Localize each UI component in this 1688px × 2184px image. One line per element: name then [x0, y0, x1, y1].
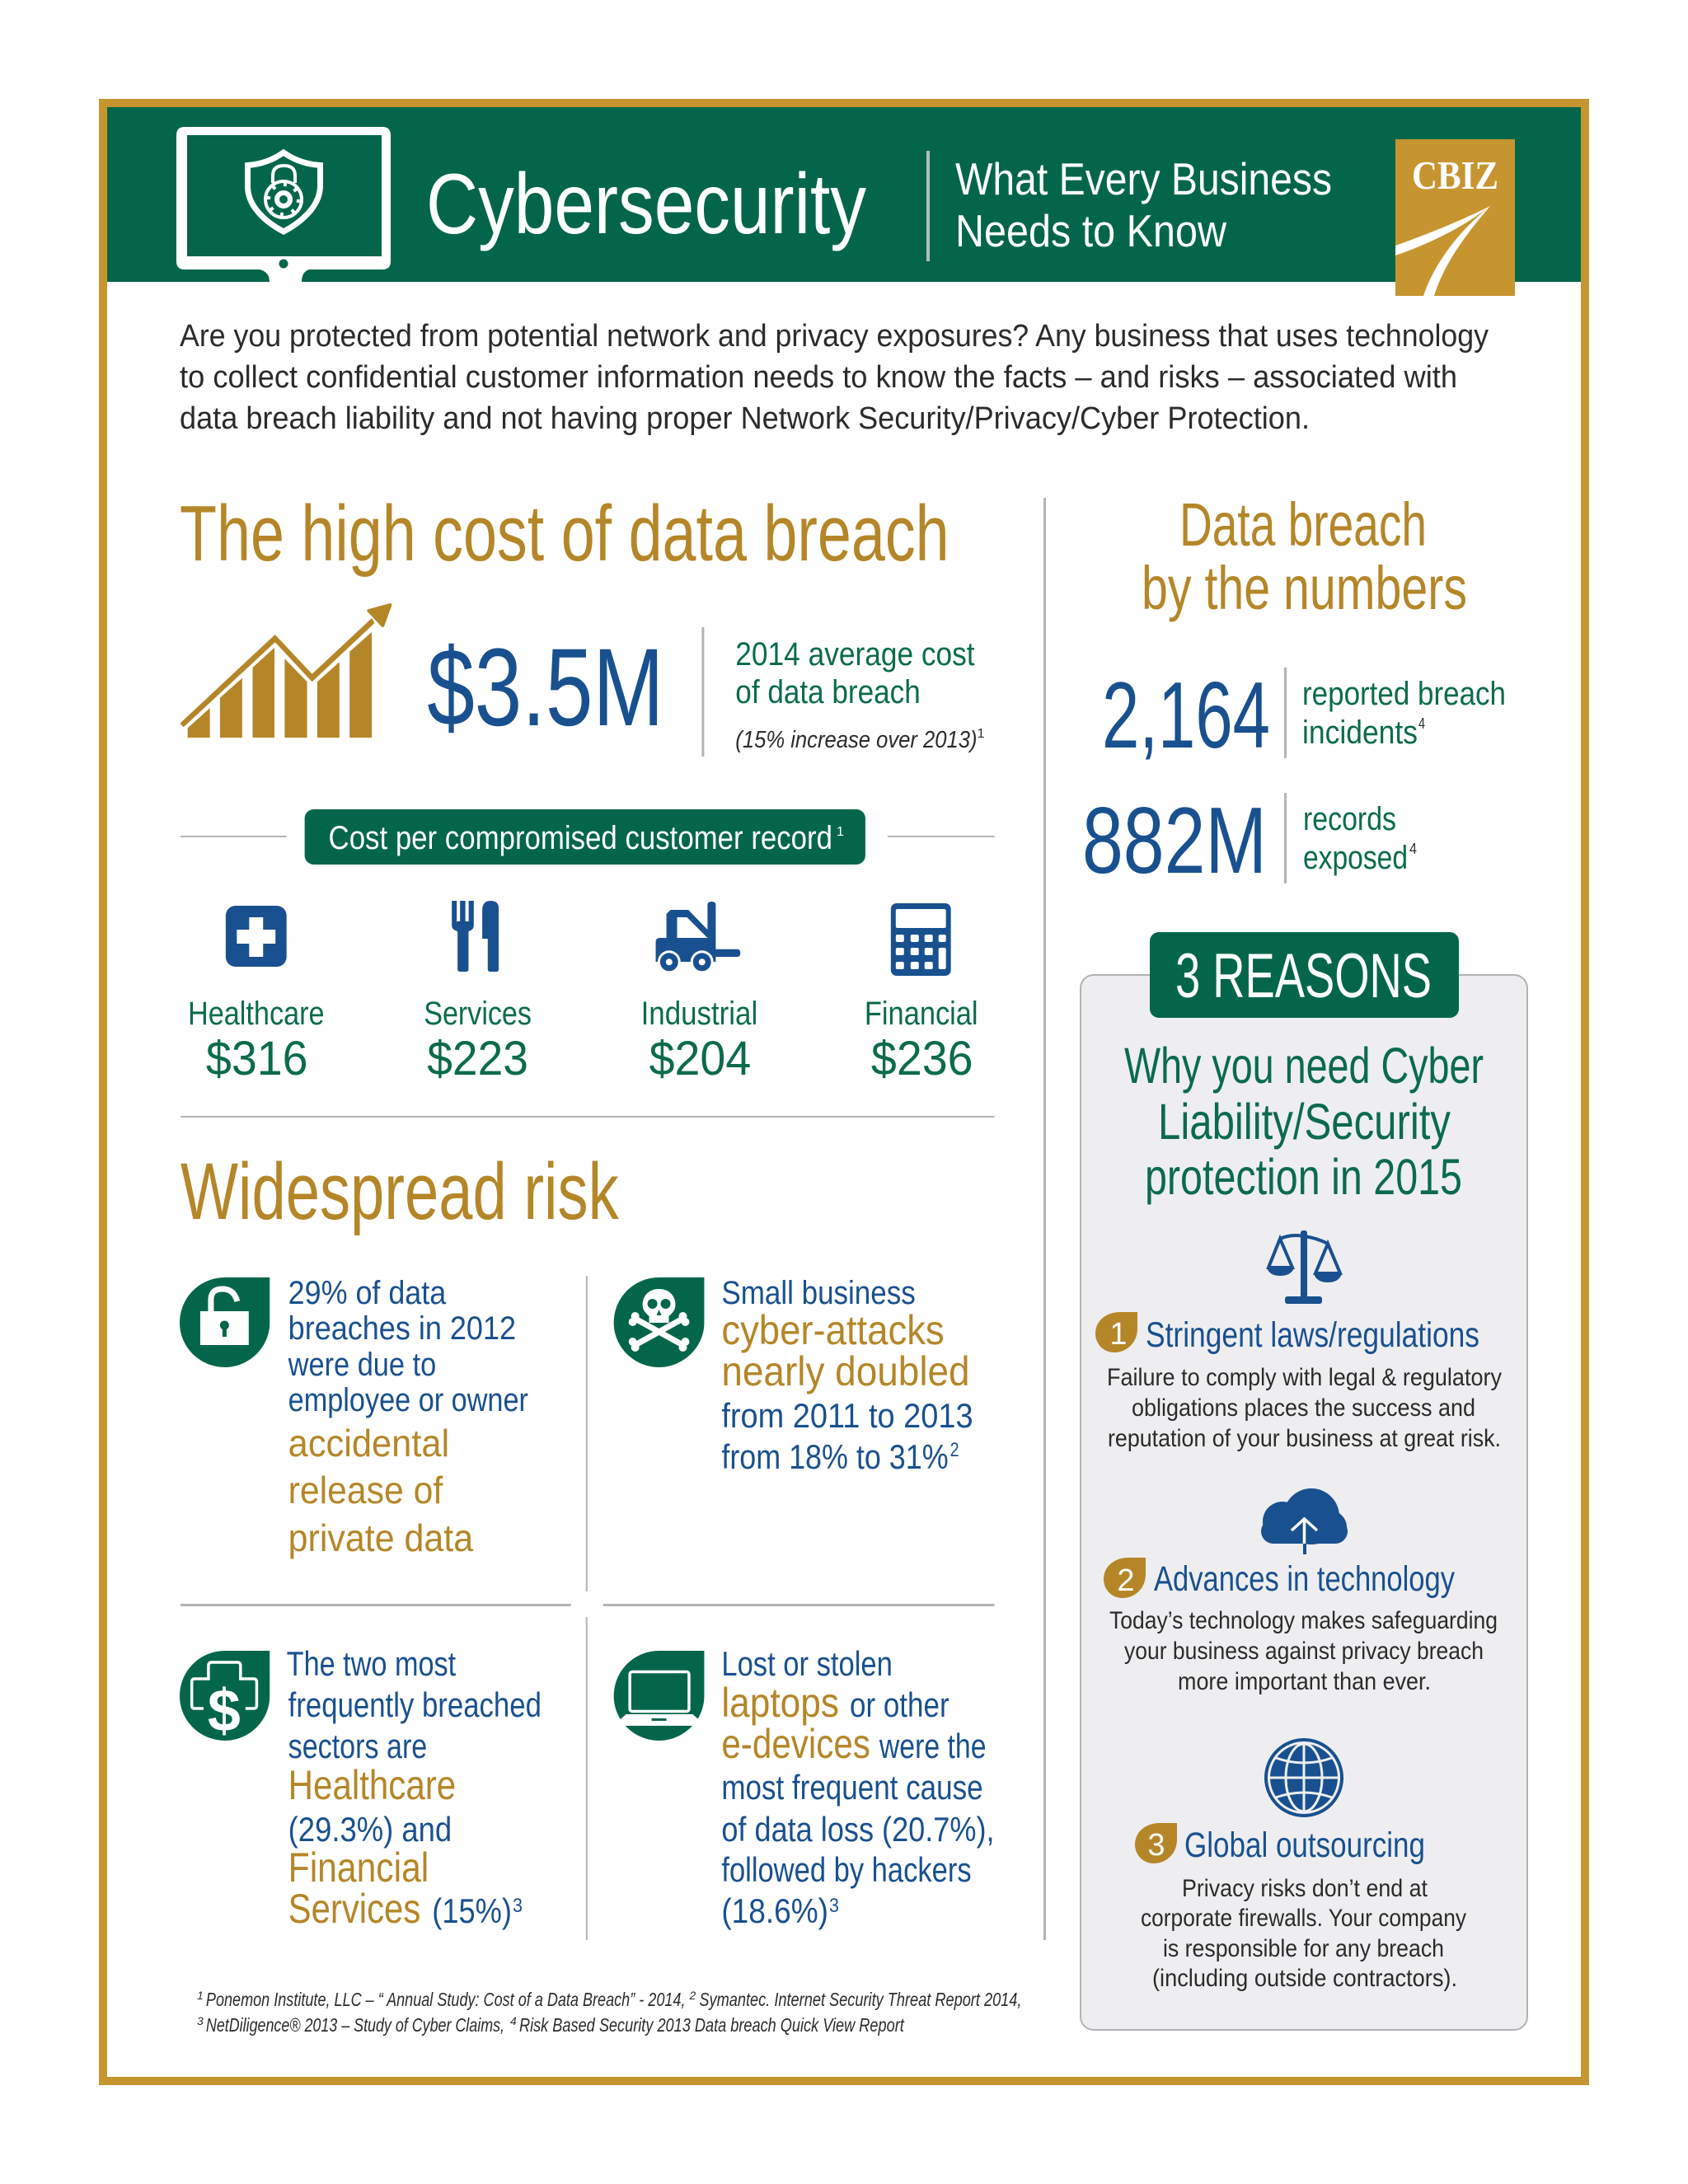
header banner [107, 107, 1581, 296]
text block: Lost or stolen [721, 1644, 893, 1683]
icon: fork and knife [452, 901, 499, 972]
reason 3: Global outsourcing [1184, 1825, 1425, 1865]
icon: monitor with shield lock [176, 127, 391, 282]
sector costs: $316 [206, 1033, 308, 1085]
stat caption: 1 [978, 727, 985, 741]
icon: forklift [656, 902, 740, 973]
text block: cyber-attacks [721, 1307, 945, 1353]
panel: breached sectors [180, 1644, 542, 1932]
heading: data breach by the numbers [1142, 490, 1467, 622]
stat caption: (15% increase over 2013) [735, 727, 978, 753]
icon: calculator [891, 903, 951, 976]
icon: rising bar chart [180, 605, 390, 738]
reason 2: Today’s technology makes safeguarding [1109, 1607, 1498, 1634]
panel heading: protection in 2015 [1145, 1149, 1462, 1205]
footnotes: Symantec. Internet Security Threat Report 2014, [699, 1989, 1021, 2010]
stat: records exposed: 882M [1082, 789, 1267, 893]
text block: The two most [287, 1644, 456, 1683]
heading: widespread risk: Widespread risk [181, 1146, 619, 1236]
text block: followed by hackers [721, 1850, 972, 1889]
intro text: to collect confidential customer information needs to know the facts – and risks – associated with [180, 360, 1457, 395]
badge: 3 [1135, 1823, 1177, 1863]
text block: nearly doubled [721, 1348, 970, 1394]
text block: from 18% to 31% [721, 1437, 949, 1476]
subtitle: What Every Business [955, 153, 1332, 204]
stat caption [735, 636, 985, 753]
icon: open padlock [180, 1277, 270, 1367]
footnotes: 2 [688, 1989, 696, 2002]
footnotes: Ponemon Institute, LLC – “ Annual Study: Cost of a Data Breach” - 2014, [206, 1989, 685, 2010]
text block: frequently breached [288, 1685, 542, 1724]
reason 1: Failure to comply with legal & regulatory [1107, 1364, 1502, 1391]
reason 1: reputation of your business at great risk. [1108, 1425, 1501, 1452]
badge: 3: 3 [1147, 1828, 1165, 1863]
reason 1: Stringent laws/regulations [1146, 1315, 1479, 1355]
reason 3 [1135, 1823, 1466, 1992]
text block: Small business [721, 1275, 916, 1311]
text block: Services [288, 1886, 420, 1932]
stat: reported incidents [1102, 663, 1506, 768]
text block: most frequent cause [721, 1768, 983, 1807]
panel heading [1124, 1038, 1484, 1205]
heading: data breach by the numbers: by the numbers [1142, 554, 1467, 622]
reason 2 [1104, 1558, 1498, 1695]
reason 3: (including outside contractors). [1152, 1965, 1457, 1992]
reason 1: obligations places the success and [1132, 1394, 1475, 1422]
text block: laptops [721, 1680, 839, 1726]
reason 2: more important than ever. [1178, 1668, 1431, 1695]
text block: breaches in 2012 [288, 1310, 516, 1347]
sector costs: $223 [427, 1033, 528, 1085]
intro text [180, 319, 1489, 436]
badge: 2 [1104, 1558, 1146, 1598]
text block [288, 1275, 528, 1559]
stat: reported incidents: reported breach [1302, 676, 1506, 712]
text block: employee or owner [288, 1382, 528, 1418]
stat: reported incidents: 2,164 [1102, 663, 1270, 768]
footnotes: Risk Based Security 2013 Data breach Quick View Report [519, 2014, 905, 2036]
stat: records exposed: 4 [1409, 841, 1417, 857]
footnotes: 3 [197, 2014, 204, 2027]
text block: 3 [513, 1895, 523, 1917]
text block [721, 1644, 995, 1930]
sector costs: Services [424, 996, 532, 1032]
badge: 1 [1095, 1312, 1137, 1352]
text block: of data loss (20.7%), [721, 1810, 995, 1849]
icon: medical dollar [180, 1651, 270, 1744]
sector costs: Financial [865, 996, 978, 1032]
reason 3: Privacy risks don’t end at [1182, 1875, 1428, 1902]
subtitle [955, 153, 1332, 256]
text block: 29% of data [288, 1275, 447, 1311]
badge: 3 reasons: 3 REASONS [1175, 941, 1432, 1011]
panel: lost devices [614, 1644, 995, 1930]
badge: 1: 1 [1109, 1317, 1128, 1352]
panel: cyber-attacks [614, 1275, 973, 1476]
reason 2: your business against privacy breach [1124, 1638, 1484, 1665]
logo: CBIZ: CBIZ [1412, 152, 1498, 198]
panel heading: Liability/Security [1158, 1094, 1451, 1150]
reason 3: is responsible for any breach [1163, 1935, 1444, 1962]
banner: cost per record: 1 [837, 825, 844, 839]
footnotes: 1 [197, 1989, 204, 2002]
title: Cybersecurity [426, 157, 866, 252]
stat: records exposed: records [1303, 801, 1396, 837]
sector costs [188, 996, 978, 1085]
text block: were due to [288, 1347, 436, 1383]
left column [180, 490, 1021, 2036]
stat: reported incidents: 4 [1418, 715, 1425, 732]
sector costs: Industrial [641, 996, 757, 1032]
banner: cost per record: Cost per compromised customer record [329, 820, 832, 856]
icon: cloud upload [1261, 1488, 1348, 1554]
text block: or other [850, 1685, 950, 1724]
reason 3: corporate firewalls. Your company [1141, 1905, 1466, 1932]
text block: Healthcare [288, 1762, 456, 1808]
footnotes: NetDiligence® 2013 – Study of Cyber Claims, [206, 2014, 504, 2036]
text block: 2 [950, 1439, 959, 1461]
icon: healthcare [226, 906, 287, 967]
sector costs: $236 [871, 1033, 973, 1085]
banner: cost per record [305, 809, 865, 865]
reason 2: Advances in technology [1154, 1559, 1455, 1599]
subtitle: Needs to Know [955, 205, 1226, 256]
panel heading: Why you need Cyber [1124, 1038, 1484, 1094]
text block: private data [288, 1516, 474, 1559]
text block: 3 [829, 1895, 839, 1917]
text block: (15%) [432, 1891, 512, 1930]
text block: (18.6%) [721, 1891, 828, 1930]
text block: release of [288, 1469, 443, 1511]
icon: skull and crossbones [614, 1277, 704, 1367]
text block: accidental [288, 1422, 449, 1465]
stat: reported incidents: incidents [1302, 715, 1418, 751]
icon: globe [1266, 1740, 1342, 1816]
sector costs: $204 [649, 1033, 751, 1085]
text block [721, 1275, 973, 1476]
icon: scales [1267, 1230, 1342, 1304]
heading: data breach by the numbers: Data breach [1179, 490, 1427, 559]
text block [287, 1644, 542, 1932]
logo: CBIZ [1395, 139, 1515, 296]
sector costs: Healthcare [188, 996, 325, 1032]
text block: were the [879, 1727, 987, 1765]
stat: records exposed: exposed [1303, 840, 1408, 876]
text block: from 2011 to 2013 [721, 1396, 973, 1435]
text block: sectors are [288, 1727, 427, 1765]
intro text: Are you protected from potential network and privacy exposures? Any business that uses technology [180, 319, 1489, 354]
intro text: data breach liability and not having proper Network Security/Privacy/Cyber Protection. [180, 401, 1310, 436]
stat caption: 2014 average cost [735, 636, 975, 673]
heading: the high cost of data breach: The high cost of data breach [180, 490, 950, 578]
stat caption: of data breach [735, 674, 921, 710]
badge: 3 reasons [1150, 932, 1459, 1018]
footnotes: 4 [510, 2014, 517, 2027]
icon: medical dollar: $ [208, 1678, 241, 1744]
footnotes [197, 1989, 1021, 2036]
panel: 3 reasons [1081, 932, 1527, 2030]
panel: accidental release [180, 1275, 528, 1559]
text block: e-devices [721, 1721, 870, 1767]
reason 1 [1095, 1312, 1502, 1452]
text block: (29.3%) and [288, 1810, 452, 1849]
text block: Financial [288, 1844, 429, 1891]
icon: laptop [614, 1651, 704, 1741]
badge: 2: 2 [1117, 1563, 1135, 1598]
stat: average cost: $3.5M [427, 626, 664, 749]
